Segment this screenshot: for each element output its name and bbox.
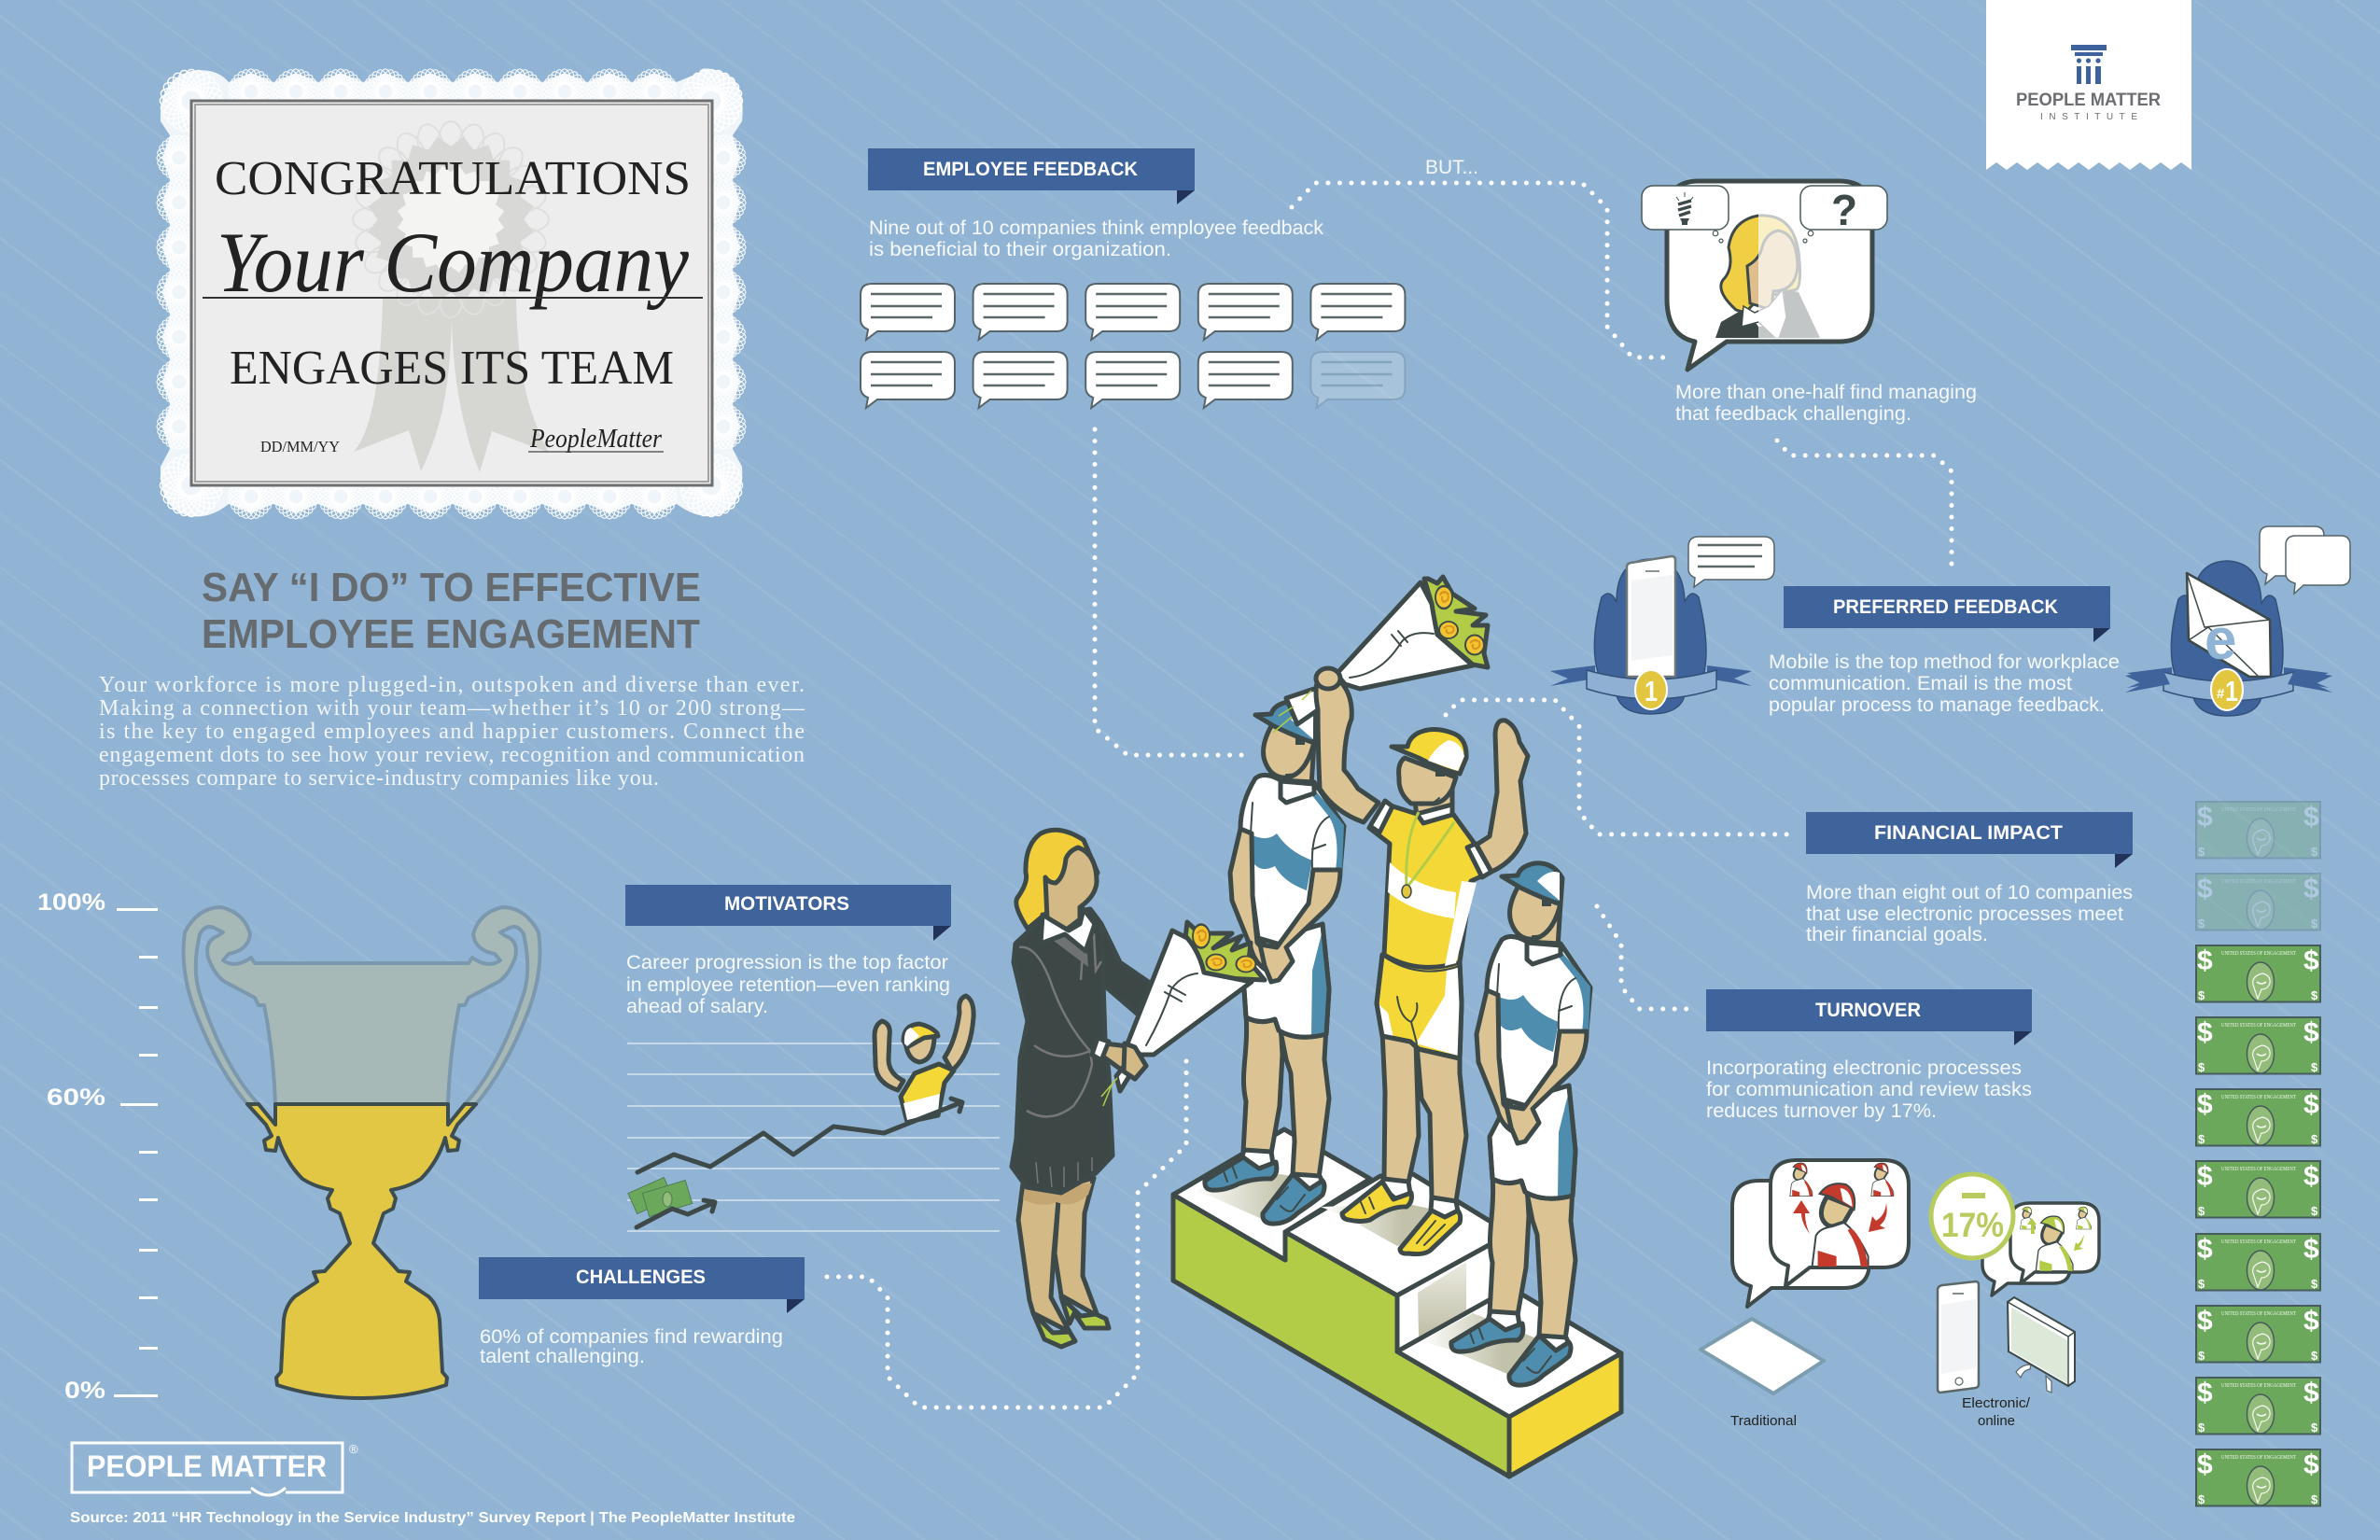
bill 6 [2196,1161,2320,1218]
bill 7 [2196,1234,2320,1291]
collar [1041,909,1095,951]
percent scale: 0% [64,1378,105,1404]
turnover text: reduces turnover by 17%. [1706,1100,1937,1122]
rider left [1205,702,1344,1224]
certificate subtitle: ENGAGES ITS TEAM [230,342,674,395]
motivators text: ahead of salary. [626,996,768,1017]
bill 3: $ [2198,988,2205,1002]
rider right [1451,863,1590,1385]
percent scale [37,889,158,1404]
ribbon rosette [353,121,549,472]
heading: EMPLOYEE ENGAGEMENT [202,611,700,657]
date: DD/MM/YY [260,438,340,455]
shoes [1033,1313,1075,1347]
bill 7: UNITED STATES OF ENGAGEMENT [2221,1239,2296,1245]
challenges text: talent challenging. [480,1346,645,1367]
logo: PeopleMatter Institute: PEOPLE MATTER [2016,91,2161,110]
certificate paper [191,101,712,485]
faded bill 2: $ [2303,874,2319,904]
upper bouquet [1273,577,1488,733]
bill 10 [2196,1449,2320,1506]
source: Source: 2011 “HR Technology in the Service Industry” Survey Report | The PeopleMatter Institute [70,1510,795,1526]
lace border [156,68,747,520]
icon: woman thinking bubble: ? [1831,186,1857,234]
traditional label: Traditional [1730,1414,1797,1429]
icon: mobile badge [1550,537,1774,714]
challenges text: 60% of companies find rewarding [480,1326,783,1348]
trophy filled portion [247,1104,476,1398]
icon: column [2071,45,2107,84]
turnover banner [1706,989,2032,1045]
bill 8: UNITED STATES OF ENGAGEMENT [2221,1310,2296,1317]
brand logo: ® [349,1442,358,1456]
traditional turnover bubbles [1732,1160,1909,1307]
bill 7: $ [2198,1277,2205,1291]
company name: Your Company [217,215,689,310]
bill 5: $ [2311,1132,2318,1146]
bill 7: $ [2311,1277,2318,1291]
challenges banner: CHALLENGES [576,1267,706,1288]
17 percent badge: 17% [1941,1206,2004,1244]
intro text: engagement dots to see how your review, recognition and communication [99,743,805,767]
icon: monitor [2008,1297,2075,1393]
bill 9 [2196,1378,2320,1435]
employee feedback banner: EMPLOYEE FEEDBACK [923,159,1138,180]
bill 9: $ [2303,1378,2319,1408]
bill 6: UNITED STATES OF ENGAGEMENT [2221,1166,2296,1172]
turnover text: Incorporating electronic processes [1706,1057,2022,1079]
managing feedback text: More than one-half find managing [1675,382,1977,403]
preferred feedback text: Mobile is the top method for workplace [1769,651,2120,673]
arrow: down [1869,1203,1887,1232]
turnover text: for communication and review tasks [1706,1079,2032,1100]
bill 9: $ [2311,1421,2318,1435]
faded bill 2: $ [2311,917,2318,931]
icon: message bubble [1688,537,1774,587]
certificate title: CONGRATULATIONS [215,152,691,205]
bill 3: $ [2197,945,2213,976]
medal: 1 [2225,675,2238,707]
money column [2196,802,2320,1506]
bill 4: UNITED STATES OF ENGAGEMENT [2221,1022,2296,1029]
bill 10: $ [2197,1449,2213,1480]
hair [1016,830,1098,929]
medal: # [2217,686,2225,702]
electronic label: Electronic/ [1962,1396,2031,1411]
medal [2211,669,2243,710]
icon: light bulb [1676,192,1693,225]
champion mini figure [875,996,973,1122]
bill 5: $ [2303,1089,2319,1120]
back arm [1090,909,1150,1014]
bill 3: $ [2303,945,2319,976]
icon: paper [1701,1319,1824,1393]
bill 10: $ [2311,1492,2318,1506]
bill 3 [2196,945,2320,1002]
trophy unfilled portion [183,907,539,1104]
employee feedback text: is beneficial to their organization. [869,239,1171,260]
icon: envelope [2187,573,2271,677]
intro text: processes compare to service-industry companies like you. [99,766,659,791]
motivators text: Career progression is the top factor [626,952,948,973]
icon: email badge [2125,526,2350,716]
faded bill 1: $ [2197,802,2213,833]
electronic label [1962,1396,2031,1429]
trophy chart [183,907,539,1398]
rider center, winner [1316,668,1528,1254]
employee feedback banner [868,148,1195,204]
electronic turnover bubbles [1982,1203,2099,1295]
bill 5: $ [2198,1132,2205,1146]
icon: bubbles [2260,526,2350,594]
brand logo [72,1442,358,1495]
preferred feedback banner: PREFERRED FEEDBACK [1833,596,2058,618]
managing feedback text [1675,382,1977,425]
arrow: up [1793,1200,1810,1234]
suit [1012,909,1113,1193]
icon: phone [1938,1281,1979,1393]
challenges banner [479,1257,805,1313]
speech bubbles: nine of ten [861,284,1405,408]
bill 4: $ [2311,1060,2318,1074]
bill 8: $ [2197,1306,2213,1337]
signature: PeopleMatter [529,425,662,454]
preferred feedback text: popular process to manage feedback. [1769,694,2105,716]
faded bill 1 [2196,802,2320,859]
financial impact banner: FINANCIAL IMPACT [1874,822,2063,844]
dotted connectors [827,183,1952,1407]
lower bouquet [1101,922,1265,1106]
faded bill 1: $ [2303,802,2319,833]
bill 6: $ [2198,1204,2205,1218]
bill 6: $ [2311,1204,2318,1218]
logo: PeopleMatter Institute [1986,0,2191,170]
bill 4: $ [2198,1060,2205,1074]
legs [1018,1183,1070,1332]
employee feedback text [869,217,1324,260]
intro text: Your workforce is more plugged-in, outspoken and diverse than ever. [99,673,805,697]
bill 8: $ [2198,1349,2205,1363]
financial impact text [1806,882,2133,945]
bill 6: $ [2303,1161,2319,1192]
logo: PeopleMatter Institute: INSTITUTE [2040,112,2137,122]
turnover text [1706,1057,2032,1122]
motivators banner: MOTIVATORS [724,893,849,915]
financial impact text: that use electronic processes meet [1806,903,2123,925]
lapel [1054,936,1088,967]
intro text: is the key to engaged employees and happier customers. Connect the [99,720,805,744]
financial impact banner [1806,812,2133,868]
bill 4: $ [2303,1017,2319,1048]
bill 6: $ [2197,1161,2213,1192]
bill 9: $ [2198,1421,2205,1435]
bill 9: UNITED STATES OF ENGAGEMENT [2221,1382,2296,1389]
electronic label: online [1978,1414,2015,1429]
bill 9: $ [2197,1378,2213,1408]
motivators banner [625,885,951,941]
faded bill 2 [2196,874,2320,931]
but label: BUT... [1425,157,1478,178]
bill 8: $ [2311,1349,2318,1363]
faded bill 1: UNITED STATES OF ENGAGEMENT [2221,806,2296,813]
bill 5: $ [2197,1089,2213,1120]
bill 8 [2196,1306,2320,1363]
17 percent badge [1931,1174,2013,1258]
motivators text: in employee retention—even ranking [626,974,950,996]
faded bill 1: $ [2198,845,2205,859]
money stack [628,1177,693,1216]
icon: woman thinking bubble [1642,181,1887,370]
faded bill 1: $ [2311,845,2318,859]
turnover banner: TURNOVER [1815,1000,1921,1021]
bill 8: $ [2303,1306,2319,1337]
bill 10: UNITED STATES OF ENGAGEMENT [2221,1454,2296,1461]
face [1045,847,1097,931]
faded bill 2: UNITED STATES OF ENGAGEMENT [2221,878,2296,885]
medal [1635,670,1667,709]
motivators text [626,952,950,1017]
signature line [203,297,703,299]
preferred feedback text: communication. Email is the most [1769,673,2072,694]
percent scale: 60% [47,1085,105,1111]
medal: 1 [1645,675,1658,707]
bill 3: UNITED STATES OF ENGAGEMENT [2221,950,2296,957]
heading: SAY “I DO” TO EFFECTIVE [202,565,701,610]
bill 7: $ [2197,1234,2213,1265]
bill 4: $ [2197,1017,2213,1048]
financial impact text: More than eight out of 10 companies [1806,882,2133,903]
bill 5: UNITED STATES OF ENGAGEMENT [2221,1094,2296,1100]
bill 7: $ [2303,1234,2319,1265]
bill 3: $ [2311,988,2318,1002]
bill 10: $ [2303,1449,2319,1480]
preferred feedback text [1769,651,2120,716]
podium [1173,1129,1621,1477]
brand logo: PEOPLE MATTER [87,1449,327,1483]
career line chart [627,996,1000,1231]
faded bill 2: $ [2198,917,2205,931]
intro text [99,673,805,791]
managing feedback text: that feedback challenging. [1675,403,1911,425]
bill 5 [2196,1089,2320,1146]
icon: envelope: e [2205,608,2236,672]
faded bill 2: $ [2197,874,2213,904]
certificate [156,68,747,520]
woman presenter [1012,830,1150,1347]
employee feedback text: Nine out of 10 companies think employee feedback [869,217,1324,239]
heading [202,565,701,657]
hand and cuff [1103,1043,1146,1079]
intro text: Making a connection with your team—whether it’s 10 or 200 strong— [99,696,805,721]
preferred feedback banner [1784,586,2110,642]
bill 10: $ [2198,1492,2205,1506]
percent scale: 100% [37,889,105,916]
challenges text [480,1326,783,1367]
bill 4 [2196,1017,2320,1074]
financial impact text: their financial goals. [1806,924,1988,945]
